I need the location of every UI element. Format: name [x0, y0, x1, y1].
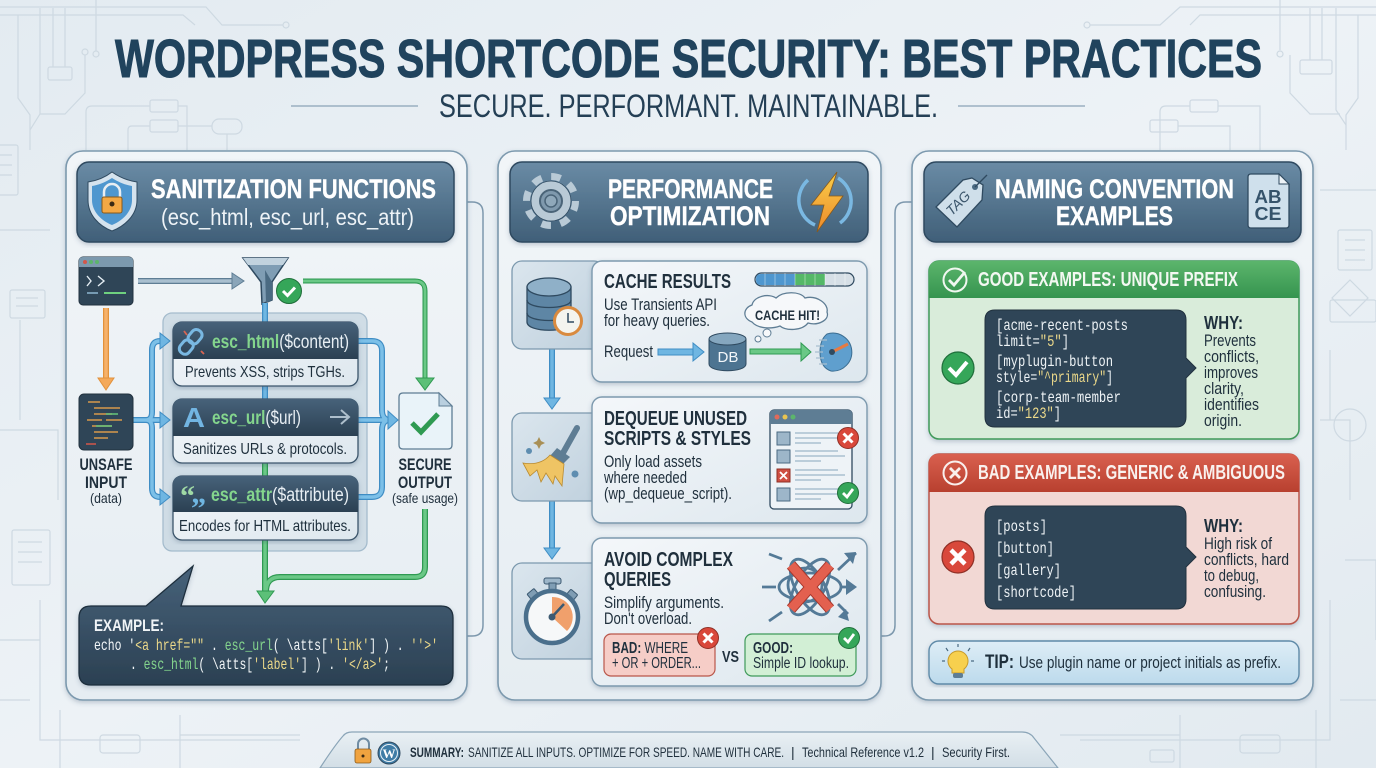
- subheading: function names: (esc_html, esc_url, esc_attr): [161, 204, 414, 230]
- summary text: Security First.: [942, 744, 1010, 760]
- good example box: Simple ID lookup.: [753, 655, 849, 672]
- why text: good: [1204, 313, 1259, 430]
- icon: light bulb: [942, 644, 974, 678]
- card: good examples: [929, 261, 1299, 439]
- code line 1: echo '<a href="" . esc_url( \atts['link'] ) . ''>': [94, 637, 438, 655]
- why text: good: clarity,: [1204, 380, 1244, 398]
- heading: cache results: CACHE RESULTS: [604, 271, 731, 293]
- icon: check badge: [942, 352, 974, 384]
- description: esc_url: Sanitizes URLs & protocols.: [183, 441, 347, 458]
- label: secure output: [392, 455, 458, 506]
- card: [592, 397, 867, 523]
- function name: esc_attr: esc_attr($attribute): [211, 485, 349, 506]
- step: dequeue unused: [512, 397, 867, 523]
- icon: letter A: A: [183, 402, 205, 433]
- code box: good shortcodes: [985, 310, 1196, 427]
- icon: gear: [526, 176, 576, 226]
- thought bubble: cache hit: [745, 293, 827, 342]
- label: unsafe input: [80, 455, 132, 506]
- icon box: broom: [512, 413, 604, 501]
- icon: lightning bolt: [799, 172, 851, 232]
- icon: ABC document: CE: [1254, 204, 1282, 224]
- good example box: [745, 628, 860, 676]
- why text: bad: to debug,: [1204, 567, 1259, 585]
- icon box: database with clock: [512, 261, 604, 349]
- why text: good: identifies: [1204, 396, 1259, 414]
- arrow: request to database: [658, 343, 704, 361]
- code box: good shortcodes: limit="5"]: [996, 333, 1069, 351]
- function name: esc_html: esc_html($content): [212, 332, 349, 353]
- heading text: performance: PERFORMANCE: [608, 174, 773, 204]
- icon: cross badge: [942, 541, 974, 573]
- bad example box: BAD: WHERE: [612, 640, 688, 657]
- why text: good: Prevents: [1204, 332, 1256, 350]
- label: secure output: OUTPUT: [398, 473, 452, 492]
- icon: funnel filter: [243, 258, 288, 304]
- summary text: |: [791, 744, 795, 760]
- flow: blue connecting arrows: [133, 303, 398, 505]
- why text: bad: [1204, 516, 1289, 601]
- description: avoid complex: [604, 594, 724, 628]
- panel header: performance: [510, 162, 868, 242]
- example heading: EXAMPLE:: [94, 616, 164, 635]
- icon: padlock: [355, 739, 371, 763]
- why text: good: WHY:: [1204, 313, 1243, 333]
- why text: bad: conflicts, hard: [1204, 551, 1289, 569]
- icon box: stopwatch: [512, 563, 604, 659]
- icon: speed gauge: [815, 333, 852, 371]
- icon: DB cylinder: [709, 333, 746, 371]
- code box: good shortcodes: [corp-team-member: [996, 389, 1121, 407]
- code box: bad shortcodes: [gallery]: [996, 562, 1061, 580]
- request label: Request: [604, 343, 653, 361]
- function name: esc_url: esc_url($url): [212, 408, 301, 429]
- icon: broken link: [177, 327, 204, 356]
- icon: quotation marks: ”: [191, 492, 206, 525]
- icon: ABC document: [1248, 174, 1289, 228]
- bad example box: + OR + ORDER...: [612, 655, 701, 672]
- description: dequeue: where needed: [603, 469, 687, 487]
- icon: tangled query crossed out: [762, 552, 857, 621]
- heading text: performance: [608, 174, 773, 231]
- thought bubble: cache hit: CACHE HIT!: [755, 307, 820, 323]
- summary text: SUMMARY:: [410, 744, 464, 760]
- label: secure output: (safe usage): [392, 490, 458, 506]
- why text: bad: confusing.: [1204, 583, 1266, 601]
- arrow: database to gauge: [750, 343, 811, 361]
- code box: bad shortcodes: [shortcode]: [996, 584, 1076, 602]
- icon: quotation marks: [180, 480, 206, 525]
- step: avoid complex queries: [512, 538, 867, 686]
- icon: secure output document: [399, 393, 452, 449]
- icon: green check badge: [276, 278, 302, 304]
- tip label: TIP:: [985, 652, 1014, 673]
- small arrow: [330, 410, 349, 424]
- label: unsafe input: (data): [90, 490, 122, 506]
- icon: terminal window: [79, 257, 133, 305]
- bad examples header: [929, 454, 1299, 492]
- label: secure output: SECURE: [398, 455, 452, 474]
- card: [592, 538, 867, 686]
- icon: shield with padlock: [88, 172, 137, 231]
- summary text: |: [931, 744, 935, 760]
- arrow: input to filter: [138, 273, 244, 289]
- card: bad examples: [929, 454, 1299, 624]
- step: cache results: [512, 261, 867, 382]
- why text: good: improves: [1204, 364, 1258, 382]
- heading: avoid complex: QUERIES: [604, 569, 671, 591]
- icon: wordpress logo: [378, 742, 400, 764]
- icon: quotation marks: “: [180, 480, 195, 513]
- icon: tag: [936, 175, 987, 227]
- code line 2: . esc_html( \atts['label'] ) . '</a>';: [130, 656, 390, 674]
- card: esc_html: [173, 322, 358, 386]
- summary text: Technical Reference v1.2: [802, 744, 924, 760]
- description: avoid complex: Don't overload.: [604, 610, 692, 628]
- tip text: Use plugin name or project initials as prefix.: [1019, 653, 1281, 672]
- description: esc_html: Prevents XSS, strips TGHs.: [185, 364, 345, 381]
- heading text: naming: [995, 174, 1234, 231]
- code box: good shortcodes: [acme-recent-posts: [996, 317, 1128, 335]
- icon: unsafe code document: [79, 394, 133, 450]
- good examples header: GOOD EXAMPLES: UNIQUE PREFIX: [978, 269, 1238, 291]
- connector lines between panels: [453, 202, 924, 636]
- description: esc_attr: Encodes for HTML attributes.: [179, 518, 351, 535]
- description: cache: for heavy queries.: [604, 312, 710, 330]
- panel header: naming: [924, 162, 1301, 242]
- heading: dequeue: SCRIPTS & STYLES: [604, 428, 751, 450]
- card: esc_url: [173, 399, 358, 463]
- summary text: SANITIZE ALL INPUTS. OPTIMIZE FOR SPEED. NAME WITH CARE.: [468, 744, 784, 760]
- heading text: performance: OPTIMIZATION: [610, 201, 770, 231]
- panel: performance optimization: [498, 151, 881, 700]
- progress bar: [755, 273, 854, 286]
- code box: bad shortcodes: [posts]: [996, 518, 1047, 536]
- code box: bad shortcodes: [button]: [996, 540, 1054, 558]
- arrow: filter to secure output: [303, 281, 434, 390]
- code box: good shortcodes: [myplugin-button: [996, 353, 1113, 371]
- heading text: naming: EXAMPLES: [1056, 201, 1173, 231]
- arrow: terminal to unsafe input: [98, 308, 114, 390]
- label: unsafe input: UNSAFE: [80, 455, 132, 474]
- label: unsafe input: INPUT: [85, 473, 128, 492]
- good examples header: [929, 261, 1299, 298]
- tip box: [929, 641, 1299, 684]
- description: cache: Use Transients API: [604, 296, 717, 314]
- heading text: naming: NAMING CONVENTION: [995, 174, 1234, 204]
- why text: good: origin.: [1204, 412, 1242, 430]
- card: [592, 261, 867, 382]
- panel: naming convention: [912, 151, 1313, 700]
- function group box: [163, 313, 367, 551]
- icon: asset checklist window: [770, 410, 858, 509]
- footer summary bar: [320, 732, 1058, 768]
- heading: dequeue: [604, 408, 751, 450]
- flow arrows between steps: [544, 349, 560, 559]
- why text: bad: WHY:: [1204, 516, 1243, 536]
- icon: wordpress logo: W: [382, 746, 396, 761]
- code box: good shortcodes: style="^primary"]: [996, 369, 1113, 387]
- panel: sanitization functions: [66, 151, 467, 700]
- description: avoid complex: Simplify arguments.: [604, 594, 724, 612]
- card: esc_attr: [173, 476, 358, 540]
- why text: bad: High risk of: [1204, 535, 1272, 553]
- why text: good: conflicts,: [1204, 348, 1259, 366]
- description: dequeue: (wp_dequeue_script).: [604, 485, 732, 503]
- heading: dequeue: DEQUEUE UNUSED: [604, 408, 747, 430]
- description: cache: [604, 296, 717, 330]
- subtitle: SECURE. PERFORMANT. MAINTAINABLE.: [439, 88, 938, 124]
- heading text: sanitization: SANITIZATION FUNCTIONS: [151, 174, 436, 204]
- heading: avoid complex: [604, 549, 734, 591]
- code example callout: [79, 566, 453, 685]
- bad example box: [604, 628, 718, 676]
- heading: avoid complex: AVOID COMPLEX: [604, 549, 734, 571]
- description: dequeue: [603, 453, 732, 503]
- icon: ABC document: AB: [1254, 187, 1282, 207]
- icon: DB cylinder: DB: [718, 349, 738, 366]
- good example box: GOOD:: [753, 640, 793, 657]
- code box: good shortcodes: id="123"]: [996, 405, 1061, 423]
- description: dequeue: Only load assets: [604, 453, 702, 471]
- code box: bad shortcodes: [985, 506, 1196, 609]
- versus label: VS: [722, 649, 739, 666]
- panel header: sanitization: [77, 162, 454, 242]
- icon: tag: TAG: [943, 187, 974, 218]
- flow: green output arrows: [257, 463, 425, 603]
